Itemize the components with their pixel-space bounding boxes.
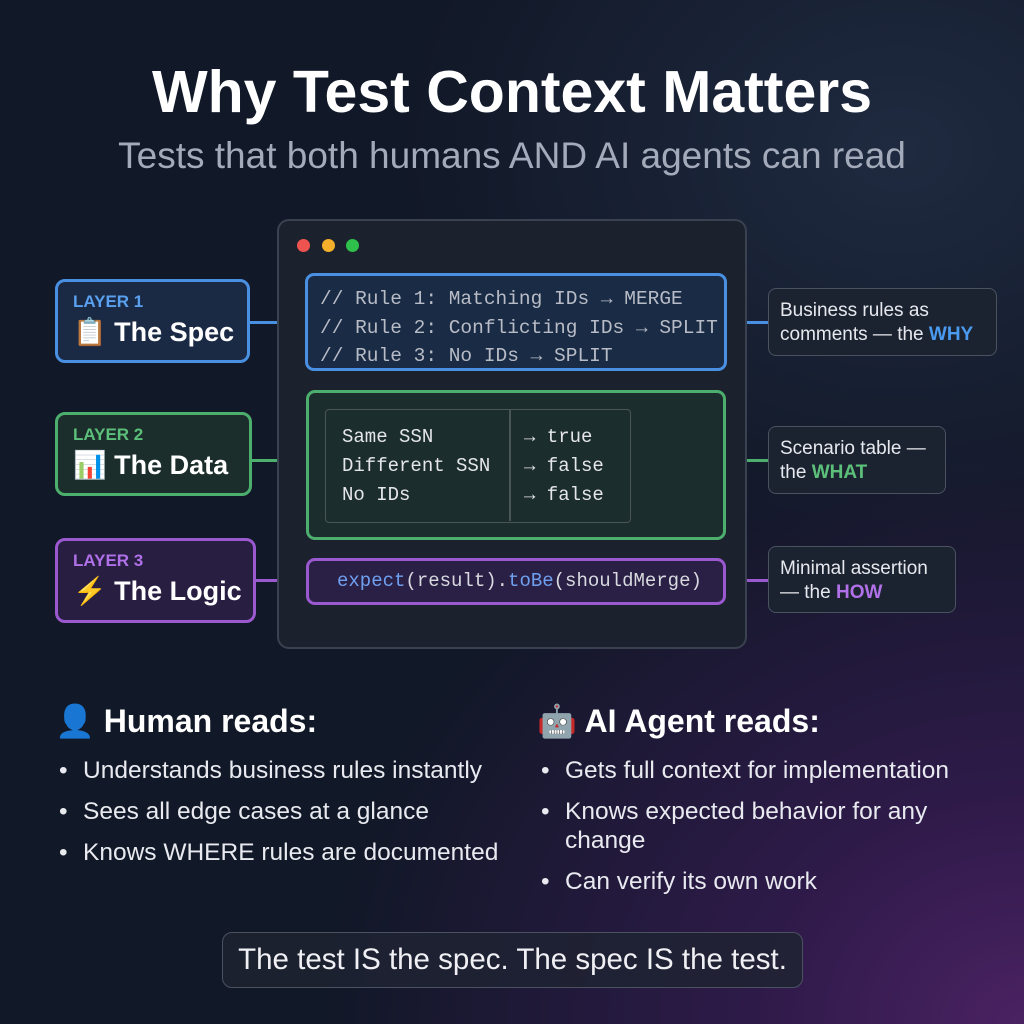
logic box: expect(result).toBe(shouldMerge) <box>337 570 702 592</box>
ai agent reads column: Can verify its own work <box>565 868 817 895</box>
ai agent reads column: 🤖 AI Agent reads: <box>537 703 820 739</box>
scenario table: → false <box>524 455 604 477</box>
spec code box: // Rule 2: Conflicting IDs → SPLIT <box>320 316 718 338</box>
layer 3: ⚡ The Logic <box>73 576 242 606</box>
layer 1 <box>55 279 250 363</box>
callout: how <box>768 546 956 613</box>
spec code box: // Rule 1: Matching IDs → MERGE <box>320 288 683 310</box>
ai agent reads column: Gets full context for implementation <box>565 757 949 784</box>
footer quote: The test IS the spec. The spec IS the test. <box>238 943 787 976</box>
spec code box <box>305 273 727 371</box>
scenario table <box>325 409 631 523</box>
layer 1: LAYER 1 <box>73 292 143 311</box>
data box <box>306 390 726 540</box>
scenario table: Same SSN <box>342 426 433 448</box>
layer 3: LAYER 3 <box>73 551 143 570</box>
ai agent reads column <box>537 703 949 895</box>
ai agent reads column: Knows expected behavior for any <box>565 798 927 825</box>
layer 2: LAYER 2 <box>73 425 143 444</box>
human reads column: Understands business rules instantly <box>83 757 482 784</box>
layer 2 <box>55 412 252 496</box>
layer 2: 📊 The Data <box>73 450 228 480</box>
spec code box: // Rule 3: No IDs → SPLIT <box>320 345 613 367</box>
window dots <box>297 239 359 252</box>
callout: what: Scenario table — <box>780 438 926 459</box>
human reads column <box>55 703 498 866</box>
layer 1: 📋 The Spec <box>73 317 234 347</box>
title: Why Test Context Matters <box>152 59 872 125</box>
code window <box>277 219 747 649</box>
scenario table: No IDs <box>342 484 410 506</box>
human reads column: 👤 Human reads: <box>55 703 317 739</box>
callout: what <box>768 426 946 494</box>
human reads column: Sees all edge cases at a glance <box>83 798 429 825</box>
subtitle: Tests that both humans AND AI agents can read <box>118 135 906 176</box>
callout: how: — the HOW <box>780 582 882 603</box>
callout: what: the WHAT <box>780 462 867 483</box>
footer quote <box>222 932 803 988</box>
callout: why: comments — the WHY <box>780 324 973 345</box>
human reads column: Knows WHERE rules are documented <box>83 839 498 866</box>
callout: why <box>768 288 997 356</box>
logic box <box>306 558 726 605</box>
callout: how: Minimal assertion <box>780 558 928 579</box>
scenario table: → false <box>524 484 604 506</box>
ai agent reads column: change <box>565 827 645 854</box>
scenario table: Different SSN <box>342 455 490 477</box>
scenario table: → true <box>524 426 592 448</box>
layer 3 <box>55 538 256 623</box>
callout: why: Business rules as <box>780 300 929 321</box>
